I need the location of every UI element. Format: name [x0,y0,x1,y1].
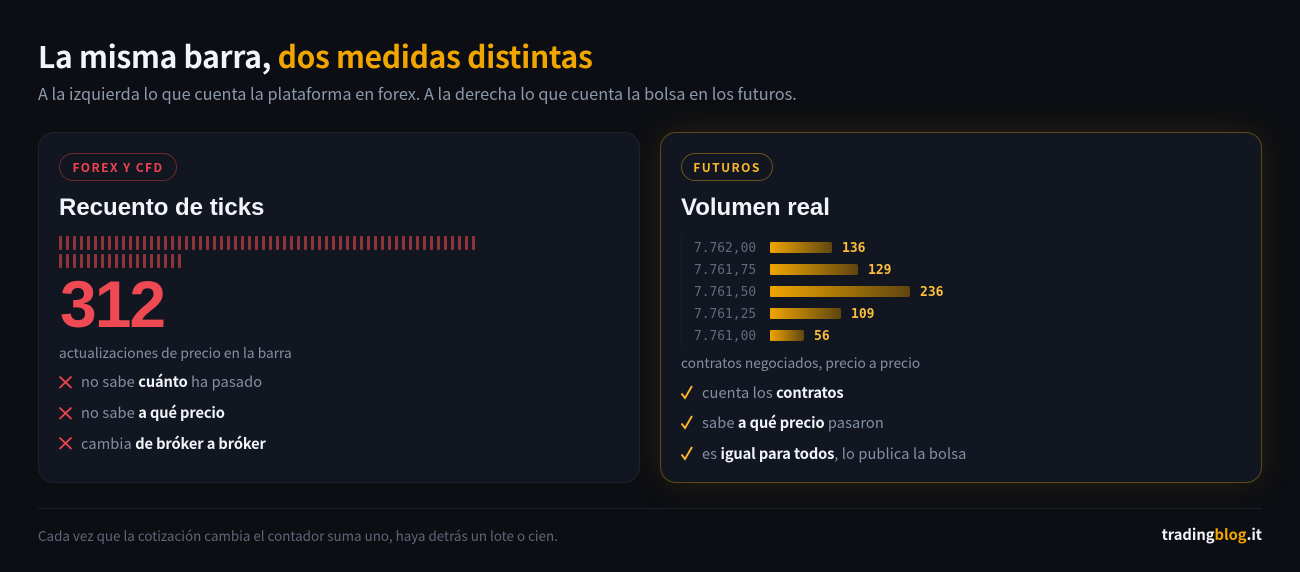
subtitle: A la izquierda lo que cuenta la plataforma en forex. A la derecha lo que cuenta la bolsa en los futuros. [38,81,797,105]
badge: forex y cfd: FOREX Y CFD [72,159,164,176]
row 7.762,00: 7.762,00 [694,241,756,256]
value 136: 136 [842,241,865,256]
footer divider [38,508,1262,509]
row 7.761,25: 7.761,25 [694,307,756,322]
panel: forex y cfd [38,132,640,483]
list item: de broker a broker: cambia de bróker a bróker [81,433,266,454]
bar 109 [770,308,841,319]
heading: volumen real: Volumen real [681,194,830,221]
value 129: 129 [868,263,891,278]
row 7.761,50: 7.761,50 [694,285,756,300]
big number 312: 312 [60,267,164,341]
list item: contratos: cuenta los contratos [702,382,844,403]
title: La misma barra, dos medidas distintas [38,33,593,77]
tick strip row 2 [59,254,181,268]
footer note: Cada vez que la cotización cambia el contador suma uno, haya detrás un lote o cien. [38,525,558,545]
list item: a que precio: no sabe a qué precio [81,402,225,423]
brand: tradingblog.it [1162,524,1262,545]
badge: futuros: FUTUROS [693,159,761,176]
tick strip row 1 [59,236,475,250]
heading: recuento de ticks: Recuento de ticks [59,194,264,221]
badge: futuros [681,153,773,181]
list item: a que precio pasaron: sabe a qué precio pasaron [702,412,884,433]
caption: ticks: actualizaciones de precio en la barra [59,342,292,362]
list item: igual para todos: es igual para todos, lo publica la bolsa [702,443,966,464]
bar 129 [770,264,858,275]
bar 136 [770,242,832,253]
badge: forex y cfd [59,153,177,181]
panel: futuros [660,132,1262,483]
row 7.761,00: 7.761,00 [694,329,756,344]
row 7.761,75: 7.761,75 [694,263,756,278]
caption: volumen: contratos negociados, precio a precio [681,352,920,372]
value 56: 56 [814,329,830,344]
list item: cuanto: no sabe cuánto ha pasado [81,371,262,392]
value 236: 236 [920,285,943,300]
value 109: 109 [851,307,874,322]
volume ladder [681,236,951,347]
bar 56 [770,330,804,341]
bar 236 [770,286,910,297]
